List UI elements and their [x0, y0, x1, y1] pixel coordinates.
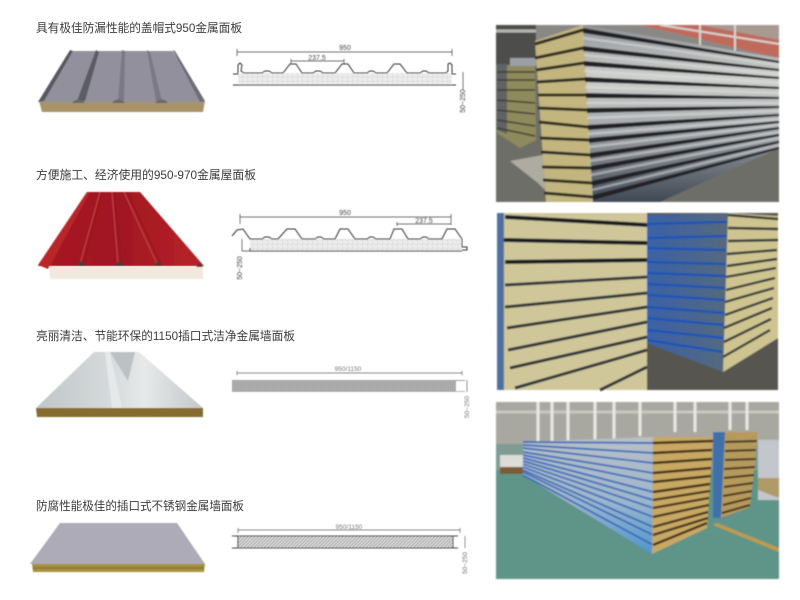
- section drawing: standing seam profile: [233, 45, 467, 113]
- heading: roof panel: 方便施工、经济使用的950-970金属屋面板: [36, 167, 256, 182]
- heading: clean wall panel: 亮丽清洁、节能环保的1150插口式洁净金属墙面板: [36, 328, 295, 343]
- photo: red roof panel: [38, 192, 204, 279]
- section drawing: stainless wall panel: 950/1150: [336, 524, 363, 531]
- section drawing: standing seam profile: 237.5: [308, 55, 326, 62]
- photo: lilac wall panel: [30, 523, 205, 572]
- photo: factory floor panel stacks: [496, 402, 779, 579]
- section drawing: clean wall panel: 950/1150: [335, 366, 362, 373]
- photo: rock wool and blue panel stacks: [497, 213, 778, 390]
- section drawing: roof profile: 50~250: [237, 256, 244, 280]
- heading: stainless wall panel: 防腐性能极佳的插口式不锈钢金属墙面板: [36, 498, 244, 513]
- section drawing: standing seam profile: 50~250: [460, 89, 467, 113]
- photo: grey standing seam panel: [38, 50, 205, 112]
- section drawing: roof profile: [232, 210, 467, 280]
- section drawing: stainless wall panel: [232, 524, 469, 574]
- section drawing: clean wall panel: 50~250: [464, 396, 471, 418]
- section drawing: clean wall panel: [232, 366, 471, 418]
- section drawing: standing seam profile: 950: [339, 45, 351, 52]
- photo: silver panel stack: [496, 25, 779, 202]
- section drawing: roof profile: 237.5: [415, 218, 433, 225]
- section drawing: stainless wall panel: 50~250: [462, 552, 469, 574]
- heading: standing seam panel: 具有极佳防漏性能的盖帽式950金属面板: [36, 20, 242, 35]
- section drawing: roof profile: 950: [339, 210, 351, 217]
- photo: white clean wall panel: [36, 352, 203, 417]
